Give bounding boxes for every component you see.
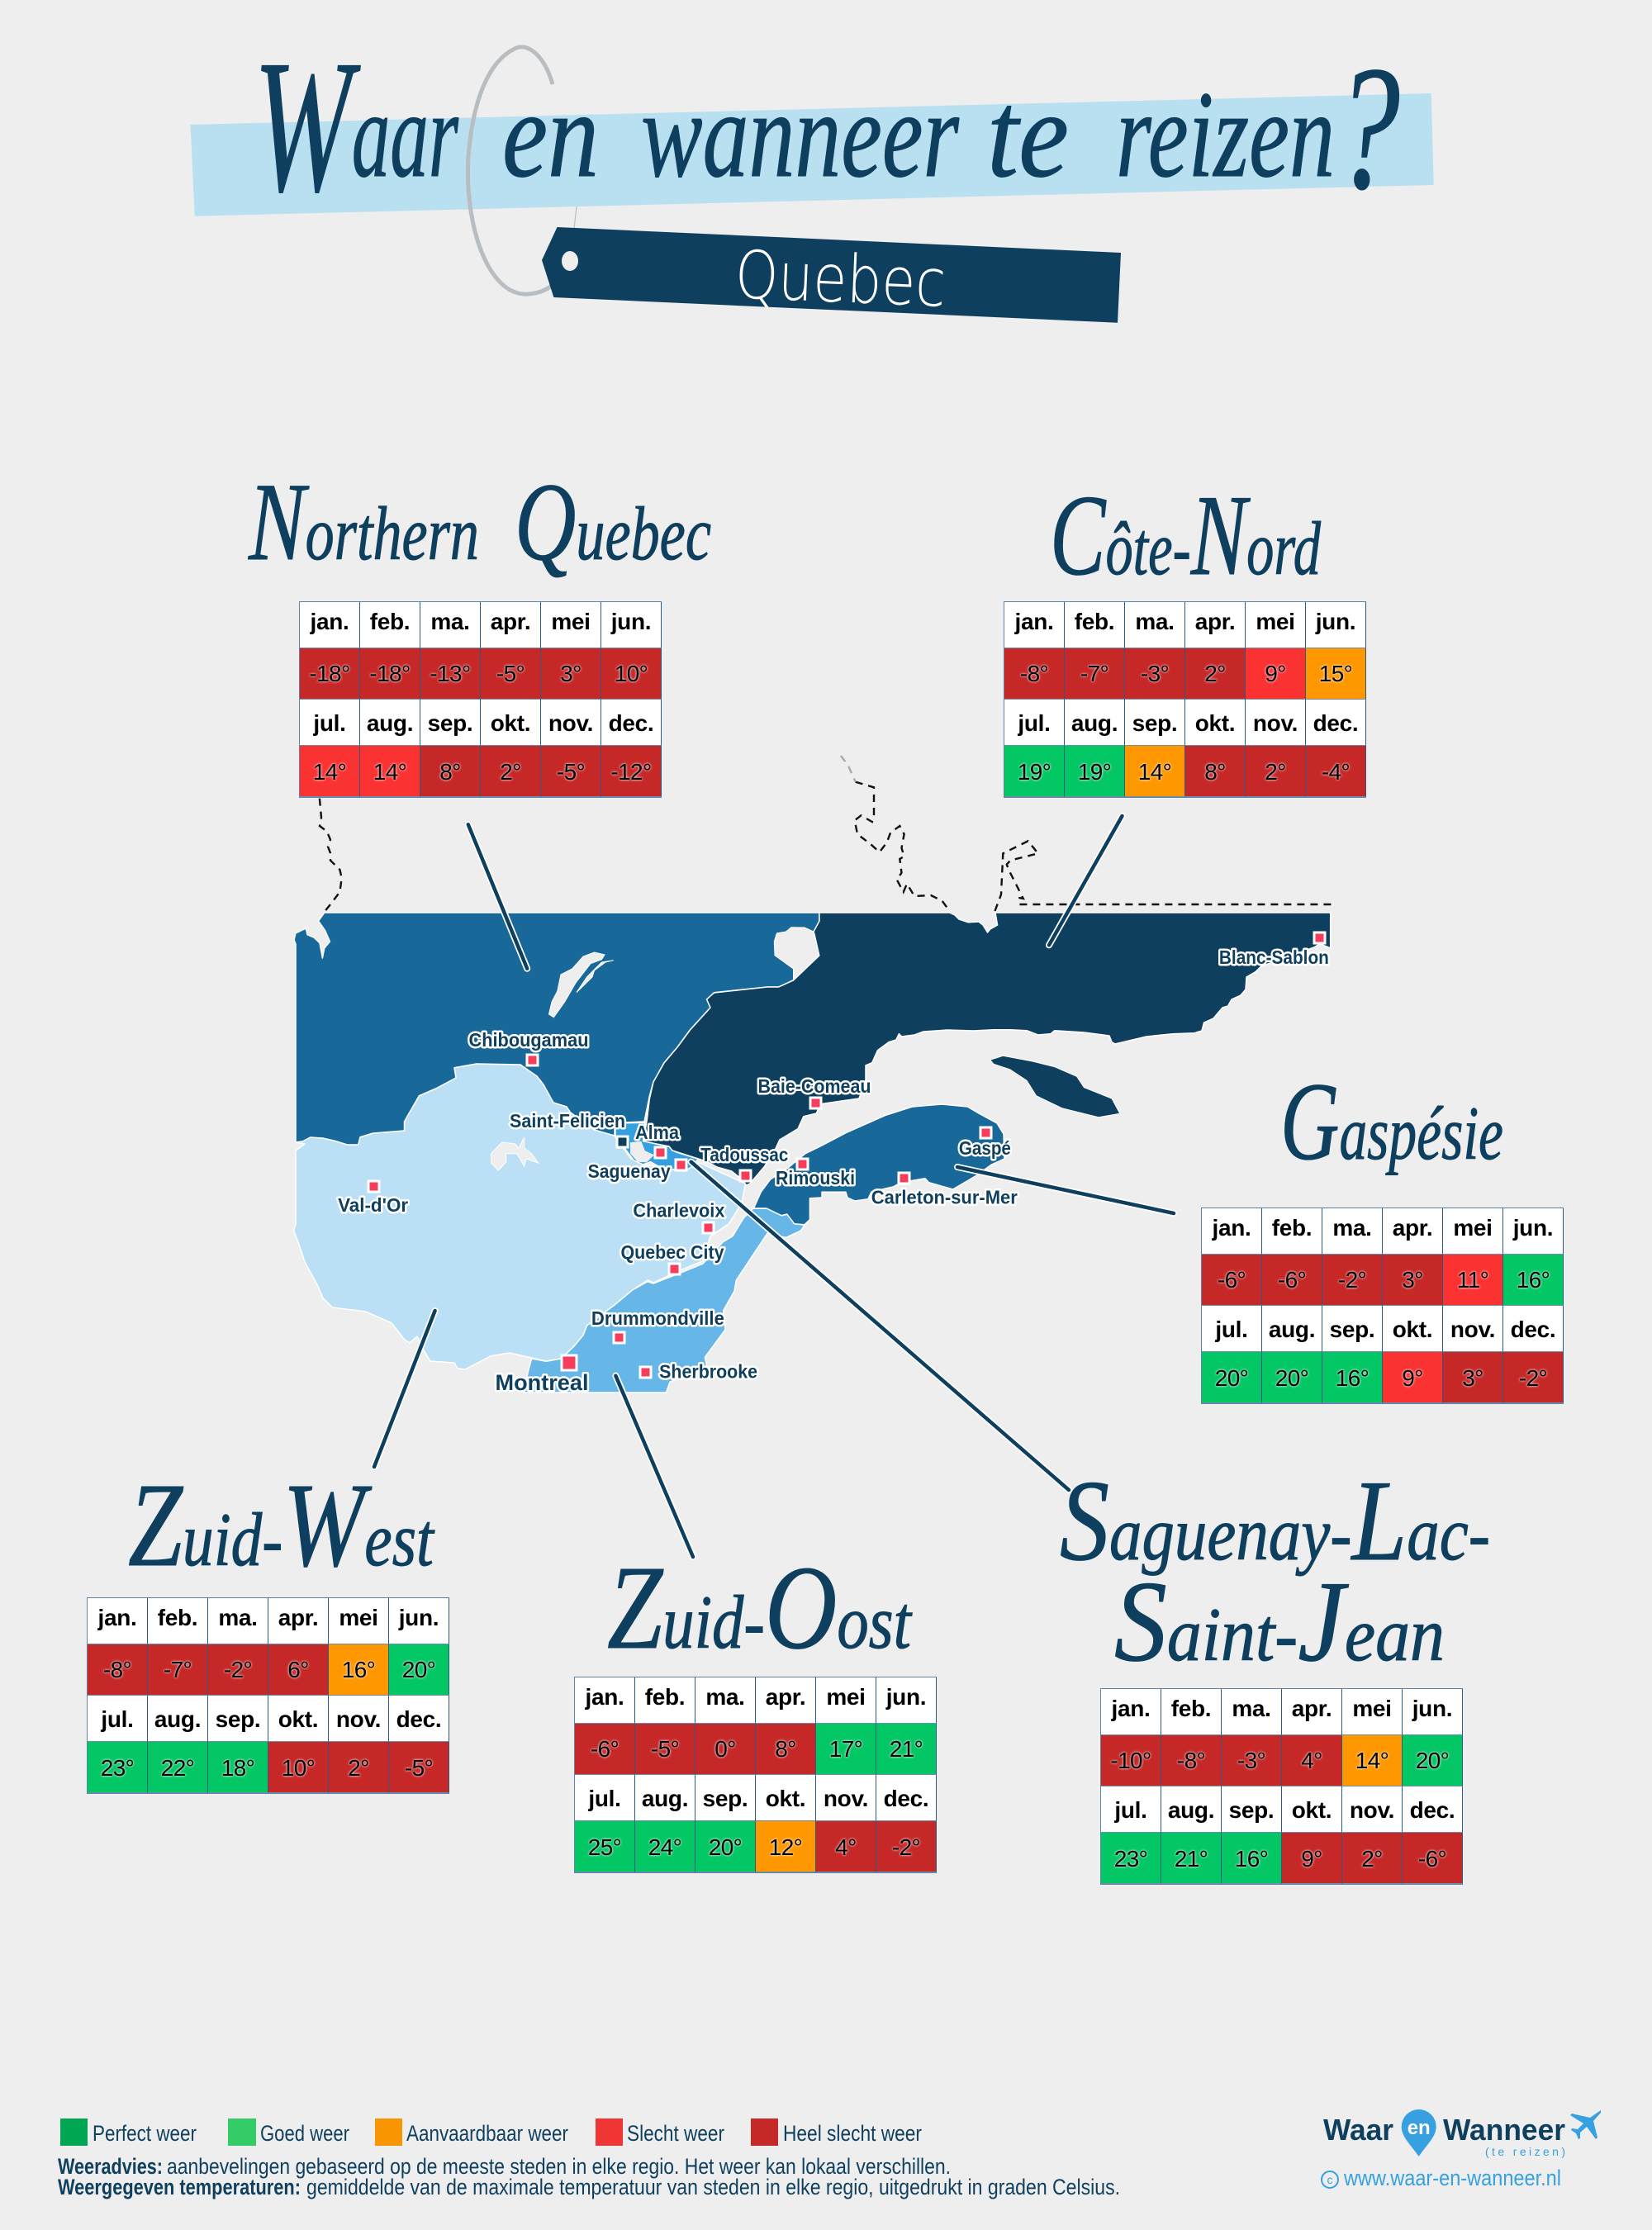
city labels: Chibougamau xyxy=(469,1029,588,1051)
pointer core lines xyxy=(374,816,1174,1557)
table: Gaspésie: dec. xyxy=(1511,1317,1555,1342)
logo: Waar xyxy=(1323,2113,1393,2147)
table: Saguenay-Lac-Saint-Jean: okt. xyxy=(1292,1797,1332,1823)
table: Zuid-Oost: apr. xyxy=(766,1684,805,1710)
table: Saguenay-Lac-Saint-Jean: 20° xyxy=(1416,1748,1449,1773)
logo: www.waar-en-wanneer.nl xyxy=(1343,2166,1561,2190)
table: Côte-Nord: 2° xyxy=(1265,759,1286,785)
table: Zuid-Oost: -5° xyxy=(651,1736,679,1762)
city markers xyxy=(368,932,1325,1378)
heading: Northern Quebec: Northern xyxy=(248,461,479,584)
legend: bad: Slecht weer xyxy=(627,2121,724,2146)
table: Gaspésie: okt. xyxy=(1393,1317,1432,1342)
table: Saguenay-Lac-Saint-Jean: ma. xyxy=(1232,1696,1271,1721)
table: Zuid-Oost: 0° xyxy=(714,1736,736,1762)
table: Zuid-West: jun. xyxy=(399,1605,439,1630)
table: Saguenay-Lac-Saint-Jean: 16° xyxy=(1235,1846,1268,1872)
island: Anticosti xyxy=(990,1056,1120,1117)
table: Saguenay-Lac-Saint-Jean: -3° xyxy=(1237,1748,1265,1773)
heading: Northern Quebec xyxy=(248,461,711,584)
table: Gaspésie: ma. xyxy=(1332,1215,1372,1241)
table: Zuid-West: dec. xyxy=(396,1706,441,1732)
table: Saguenay-Lac-Saint-Jean: jan. xyxy=(1111,1696,1151,1721)
table: Côte-Nord: mei xyxy=(1256,609,1295,634)
table: Zuid-West: 23° xyxy=(101,1755,134,1781)
heading: Côte-Nord: Côte-Nord xyxy=(1050,472,1322,600)
heading: Gaspésie: Gaspésie xyxy=(1280,1060,1503,1184)
table: Côte-Nord: jun. xyxy=(1316,609,1355,634)
city labels: Sherbrooke xyxy=(659,1361,757,1383)
footnote: gemiddelde van de maximale temperatuur van steden in elke regio, uitgedrukt in graden Celsius. xyxy=(306,2175,1120,2199)
table: Zuid-Oost: sep. xyxy=(703,1786,748,1811)
table: Zuid-Oost: mei xyxy=(826,1684,866,1710)
city labels: Baie-Comeau xyxy=(758,1075,871,1097)
table: Northern Quebec: -18° xyxy=(309,661,350,686)
title: en xyxy=(502,66,599,203)
table: Côte-Nord: -3° xyxy=(1141,661,1169,686)
table: Northern Quebec: 14° xyxy=(313,759,346,785)
logo: (te reizen) xyxy=(1485,2145,1565,2158)
table: Zuid-West: mei xyxy=(339,1605,378,1630)
table: Northern Quebec: sep. xyxy=(428,710,472,736)
table: Zuid-West: 6° xyxy=(287,1657,309,1682)
table: Gaspésie: 20° xyxy=(1275,1365,1308,1391)
table: Zuid-Oost: 25° xyxy=(588,1834,621,1860)
legend: good xyxy=(228,2118,349,2146)
table: Saguenay-Lac-Saint-Jean: jul. xyxy=(1114,1797,1147,1823)
table: Zuid-West: -5° xyxy=(405,1755,433,1781)
table: Côte-Nord: 15° xyxy=(1319,661,1352,686)
table: Gaspésie: jan. xyxy=(1212,1215,1251,1241)
table: Northern Quebec: 8° xyxy=(439,759,461,785)
tag string hook xyxy=(468,47,577,294)
table: Zuid-West: -7° xyxy=(164,1657,192,1682)
title: te xyxy=(987,66,1069,203)
heading: Saguenay-Lac-Saint-Jean: Saguenay-Lac- xyxy=(1060,1457,1490,1585)
table: Zuid-West: jan. xyxy=(97,1605,137,1630)
table: Gaspésie: 3° xyxy=(1462,1365,1483,1391)
lake: Mistassini xyxy=(548,952,605,1018)
table: Saguenay-Lac-Saint-Jean: mei xyxy=(1352,1696,1392,1721)
table: Zuid-West: ma. xyxy=(218,1605,258,1630)
table: Gaspésie: aug. xyxy=(1269,1317,1315,1342)
table: Zuid-West: 10° xyxy=(282,1755,315,1781)
table: Gaspésie xyxy=(1201,1208,1564,1404)
table: Northern Quebec: ma. xyxy=(430,609,470,634)
footnote: Weergegeven temperaturen: xyxy=(58,2175,301,2199)
border dashes xyxy=(320,756,1332,912)
table: Saguenay-Lac-Saint-Jean: 23° xyxy=(1114,1846,1147,1872)
table: Zuid-West: feb. xyxy=(158,1605,197,1630)
table: Côte-Nord: 19° xyxy=(1018,759,1051,785)
table: Zuid-Oost: 20° xyxy=(709,1834,742,1860)
table: Saguenay-Lac-Saint-Jean: sep. xyxy=(1229,1797,1274,1823)
table: Saguenay-Lac-Saint-Jean: 21° xyxy=(1175,1846,1208,1872)
region: Côte-Nord xyxy=(643,913,1331,1185)
title: wanneer xyxy=(641,66,959,203)
table: Saguenay-Lac-Saint-Jean: -10° xyxy=(1110,1748,1151,1773)
table: Zuid-Oost: 8° xyxy=(775,1736,796,1762)
table: Zuid-Oost: aug. xyxy=(642,1786,688,1811)
legend: perfect: Perfect weer xyxy=(93,2121,197,2146)
table: Côte-Nord: apr. xyxy=(1195,609,1235,634)
region: Zuid-West xyxy=(294,1064,746,1369)
table: Northern Quebec: dec. xyxy=(609,710,653,736)
table: Côte-Nord: 8° xyxy=(1204,759,1226,785)
table: Northern Quebec: jan. xyxy=(310,609,349,634)
footnote: aanbevelingen gebaseerd op de meeste steden in elke regio. Het weer kan lokaal verschillen. xyxy=(167,2154,951,2179)
table: Gaspésie: -2° xyxy=(1338,1267,1366,1293)
table: Saguenay-Lac-Saint-Jean: 2° xyxy=(1361,1846,1383,1872)
table: Gaspésie: apr. xyxy=(1393,1215,1432,1241)
table: Northern Quebec: 2° xyxy=(500,759,521,785)
lake: Albanel xyxy=(577,961,614,993)
table: Gaspésie: sep. xyxy=(1330,1317,1374,1342)
table: Côte-Nord: 2° xyxy=(1204,661,1226,686)
table: Zuid-Oost: 21° xyxy=(890,1736,923,1762)
tag: Quebec: Quebec xyxy=(733,236,947,322)
legend: perfect xyxy=(60,2118,197,2146)
table: Gaspésie: 16° xyxy=(1517,1267,1550,1293)
table: Côte-Nord: nov. xyxy=(1253,710,1298,736)
table: Northern Quebec: jul. xyxy=(313,710,346,736)
table: Zuid-West: apr. xyxy=(278,1605,318,1630)
legend: good: Goed weer xyxy=(260,2121,349,2146)
lake: Manicouagan reservoir xyxy=(774,928,819,980)
title: W xyxy=(254,21,361,231)
table: Saguenay-Lac-Saint-Jean: aug. xyxy=(1168,1797,1214,1823)
table: Zuid-Oost xyxy=(574,1677,937,1873)
table: Northern Quebec: feb. xyxy=(370,609,410,634)
heading: Saguenay-Lac-Saint-Jean xyxy=(1060,1457,1490,1686)
table: Zuid-Oost: 12° xyxy=(769,1834,802,1860)
table: Zuid-Oost: jun. xyxy=(886,1684,926,1710)
table: Saguenay-Lac-Saint-Jean: nov. xyxy=(1350,1797,1394,1823)
table: Northern Quebec: 14° xyxy=(373,759,406,785)
tag: Quebec xyxy=(542,227,1121,323)
table: Zuid-Oost: 4° xyxy=(835,1834,857,1860)
table: Côte-Nord xyxy=(1004,601,1366,798)
table: Gaspésie: 11° xyxy=(1457,1267,1488,1293)
table: Gaspésie: -6° xyxy=(1218,1267,1246,1293)
table: Saguenay-Lac-Saint-Jean xyxy=(1100,1688,1463,1885)
table: Zuid-Oost: jul. xyxy=(588,1786,621,1811)
table: Saguenay-Lac-Saint-Jean: apr. xyxy=(1292,1696,1332,1721)
table: Northern Quebec: 10° xyxy=(615,661,648,686)
table: Gaspésie: -6° xyxy=(1278,1267,1306,1293)
table: Gaspésie: 20° xyxy=(1215,1365,1248,1391)
table: Gaspésie: 16° xyxy=(1336,1365,1369,1391)
table: Zuid-West xyxy=(87,1597,449,1794)
table: Côte-Nord: sep. xyxy=(1132,710,1177,736)
table: Saguenay-Lac-Saint-Jean: -6° xyxy=(1418,1846,1446,1872)
table: Northern Quebec: mei xyxy=(551,609,591,634)
logo: Wanneer xyxy=(1443,2113,1565,2147)
table: Zuid-Oost: 17° xyxy=(829,1736,862,1762)
table: Côte-Nord: jan. xyxy=(1014,609,1054,634)
legend: acceptable: Aanvaardbaar weer xyxy=(406,2121,568,2146)
table: Zuid-Oost: ma. xyxy=(705,1684,745,1710)
title: aar xyxy=(352,66,458,203)
table: Saguenay-Lac-Saint-Jean: feb. xyxy=(1171,1696,1211,1721)
legend: bad xyxy=(596,2118,724,2146)
legend: very bad xyxy=(751,2118,922,2146)
table: Northern Quebec: -18° xyxy=(369,661,411,686)
city labels: Rimouski xyxy=(776,1167,855,1189)
logo: en xyxy=(1408,2117,1431,2139)
table: Côte-Nord: 14° xyxy=(1138,759,1171,785)
title: ? xyxy=(1335,29,1400,226)
pointer lines xyxy=(374,816,1174,1557)
title xyxy=(254,21,1400,231)
table: Northern Quebec: aug. xyxy=(367,710,413,736)
table: Saguenay-Lac-Saint-Jean: jun. xyxy=(1412,1696,1452,1721)
table: Gaspésie: jul. xyxy=(1215,1317,1248,1342)
city labels: Quebec City xyxy=(621,1241,724,1263)
table: Côte-Nord: jul. xyxy=(1018,710,1051,736)
table: Zuid-Oost: okt. xyxy=(766,1786,805,1811)
table: Côte-Nord: -8° xyxy=(1020,661,1048,686)
table: Gaspésie: -2° xyxy=(1519,1365,1547,1391)
Saguenay river xyxy=(630,1141,654,1162)
table: Northern Quebec: jun. xyxy=(611,609,651,634)
table: Gaspésie: feb. xyxy=(1272,1215,1312,1241)
table: Northern Quebec: 3° xyxy=(560,661,582,686)
table: Zuid-West: aug. xyxy=(154,1706,201,1732)
table: Gaspésie: mei xyxy=(1453,1215,1493,1241)
table: Saguenay-Lac-Saint-Jean: dec. xyxy=(1410,1797,1455,1823)
table: Côte-Nord: -7° xyxy=(1080,661,1108,686)
table: Côte-Nord: okt. xyxy=(1195,710,1235,736)
city labels: Tadoussac xyxy=(700,1144,788,1165)
table: Zuid-West: 20° xyxy=(402,1657,435,1682)
city labels: Charlevoix xyxy=(633,1199,725,1221)
table: Northern Quebec: -13° xyxy=(430,661,471,686)
table: Côte-Nord: ma. xyxy=(1135,609,1175,634)
legend: very bad: Heel slecht weer xyxy=(783,2121,922,2146)
title: reizen xyxy=(1116,66,1414,203)
table: Côte-Nord: aug. xyxy=(1071,710,1118,736)
table: Northern Quebec: okt. xyxy=(491,710,530,736)
table: Northern Quebec: -12° xyxy=(610,759,652,785)
region: Saguenay-Lac-Saint-Jean xyxy=(615,1122,699,1171)
region: Northern Quebec xyxy=(294,913,819,1145)
table: Zuid-West: 16° xyxy=(342,1657,375,1682)
table: Zuid-West: okt. xyxy=(278,1706,318,1732)
table: Côte-Nord: 9° xyxy=(1265,661,1286,686)
table: Zuid-West: 18° xyxy=(221,1755,254,1781)
table: Gaspésie: jun. xyxy=(1513,1215,1553,1241)
table: Northern Quebec xyxy=(299,601,662,798)
city labels: Carleton-sur-Mer xyxy=(871,1186,1018,1208)
city labels: Gaspé xyxy=(959,1137,1011,1159)
legend xyxy=(60,2118,922,2146)
map of Quebec xyxy=(294,756,1332,1393)
table: Zuid-Oost: -6° xyxy=(591,1736,619,1762)
table: Northern Quebec: apr. xyxy=(491,609,530,634)
footnote: Weeradvies: xyxy=(58,2154,163,2179)
table: Zuid-West: -8° xyxy=(103,1657,131,1682)
table: Zuid-Oost: feb. xyxy=(645,1684,685,1710)
table: Gaspésie: 3° xyxy=(1402,1267,1423,1293)
pointer halo lines xyxy=(374,816,1174,1557)
table: Zuid-Oost: -2° xyxy=(892,1834,920,1860)
city labels: Montreal xyxy=(496,1370,588,1395)
heading: Zuid-Oost: Zuid-Oost xyxy=(607,1542,913,1674)
table: Saguenay-Lac-Saint-Jean: 4° xyxy=(1301,1748,1322,1773)
table: Saguenay-Lac-Saint-Jean: -8° xyxy=(1177,1748,1205,1773)
table: Northern Quebec: -5° xyxy=(557,759,585,785)
table: Zuid-West: 22° xyxy=(161,1755,194,1781)
table: Zuid-Oost: dec. xyxy=(884,1786,928,1811)
heading: Saguenay-Lac-Saint-Jean: Saint-Jean xyxy=(1114,1558,1445,1686)
legend: acceptable xyxy=(375,2118,568,2146)
city labels: Alma xyxy=(635,1122,679,1143)
city labels: Val-d'Or xyxy=(338,1194,408,1216)
table: Zuid-West: sep. xyxy=(216,1706,260,1732)
footnote xyxy=(58,2154,1120,2199)
table: Côte-Nord: -4° xyxy=(1322,759,1350,785)
city labels: Drummondville xyxy=(591,1307,724,1329)
region: Gaspésie xyxy=(753,1104,1004,1225)
table: Zuid-West: nov. xyxy=(336,1706,381,1732)
heading: Northern Quebec: Quebec xyxy=(515,461,711,584)
logo xyxy=(1322,2109,1601,2190)
table: Gaspésie: 9° xyxy=(1402,1365,1423,1391)
table: Saguenay-Lac-Saint-Jean: 14° xyxy=(1355,1748,1389,1773)
table: Côte-Nord: dec. xyxy=(1313,710,1358,736)
city labels: Saguenay xyxy=(588,1160,671,1182)
table: Côte-Nord: 19° xyxy=(1078,759,1111,785)
table: Zuid-Oost: 24° xyxy=(648,1834,681,1860)
table: Northern Quebec: nov. xyxy=(548,710,593,736)
city labels: Saint-Felicien xyxy=(510,1110,625,1132)
table: Saguenay-Lac-Saint-Jean: 9° xyxy=(1301,1846,1322,1872)
table: Gaspésie: nov. xyxy=(1450,1317,1495,1342)
table: Zuid-West: 2° xyxy=(348,1755,369,1781)
lake: Saint-Jean area xyxy=(491,1137,539,1170)
title band xyxy=(191,93,1434,216)
table: Northern Quebec: -5° xyxy=(496,661,525,686)
table: Zuid-Oost: jan. xyxy=(585,1684,624,1710)
table: Côte-Nord: feb. xyxy=(1075,609,1114,634)
city labels xyxy=(338,947,1329,1395)
city labels: Blanc-Sablon xyxy=(1219,947,1329,968)
logo: c xyxy=(1327,2173,1333,2186)
region: Zuid-Oost xyxy=(525,1208,805,1393)
table: Zuid-West: -2° xyxy=(224,1657,252,1682)
heading: Zuid-West: Zuid-West xyxy=(128,1459,435,1592)
table: Zuid-Oost: nov. xyxy=(824,1786,868,1811)
table: Zuid-West: jul. xyxy=(101,1706,134,1732)
